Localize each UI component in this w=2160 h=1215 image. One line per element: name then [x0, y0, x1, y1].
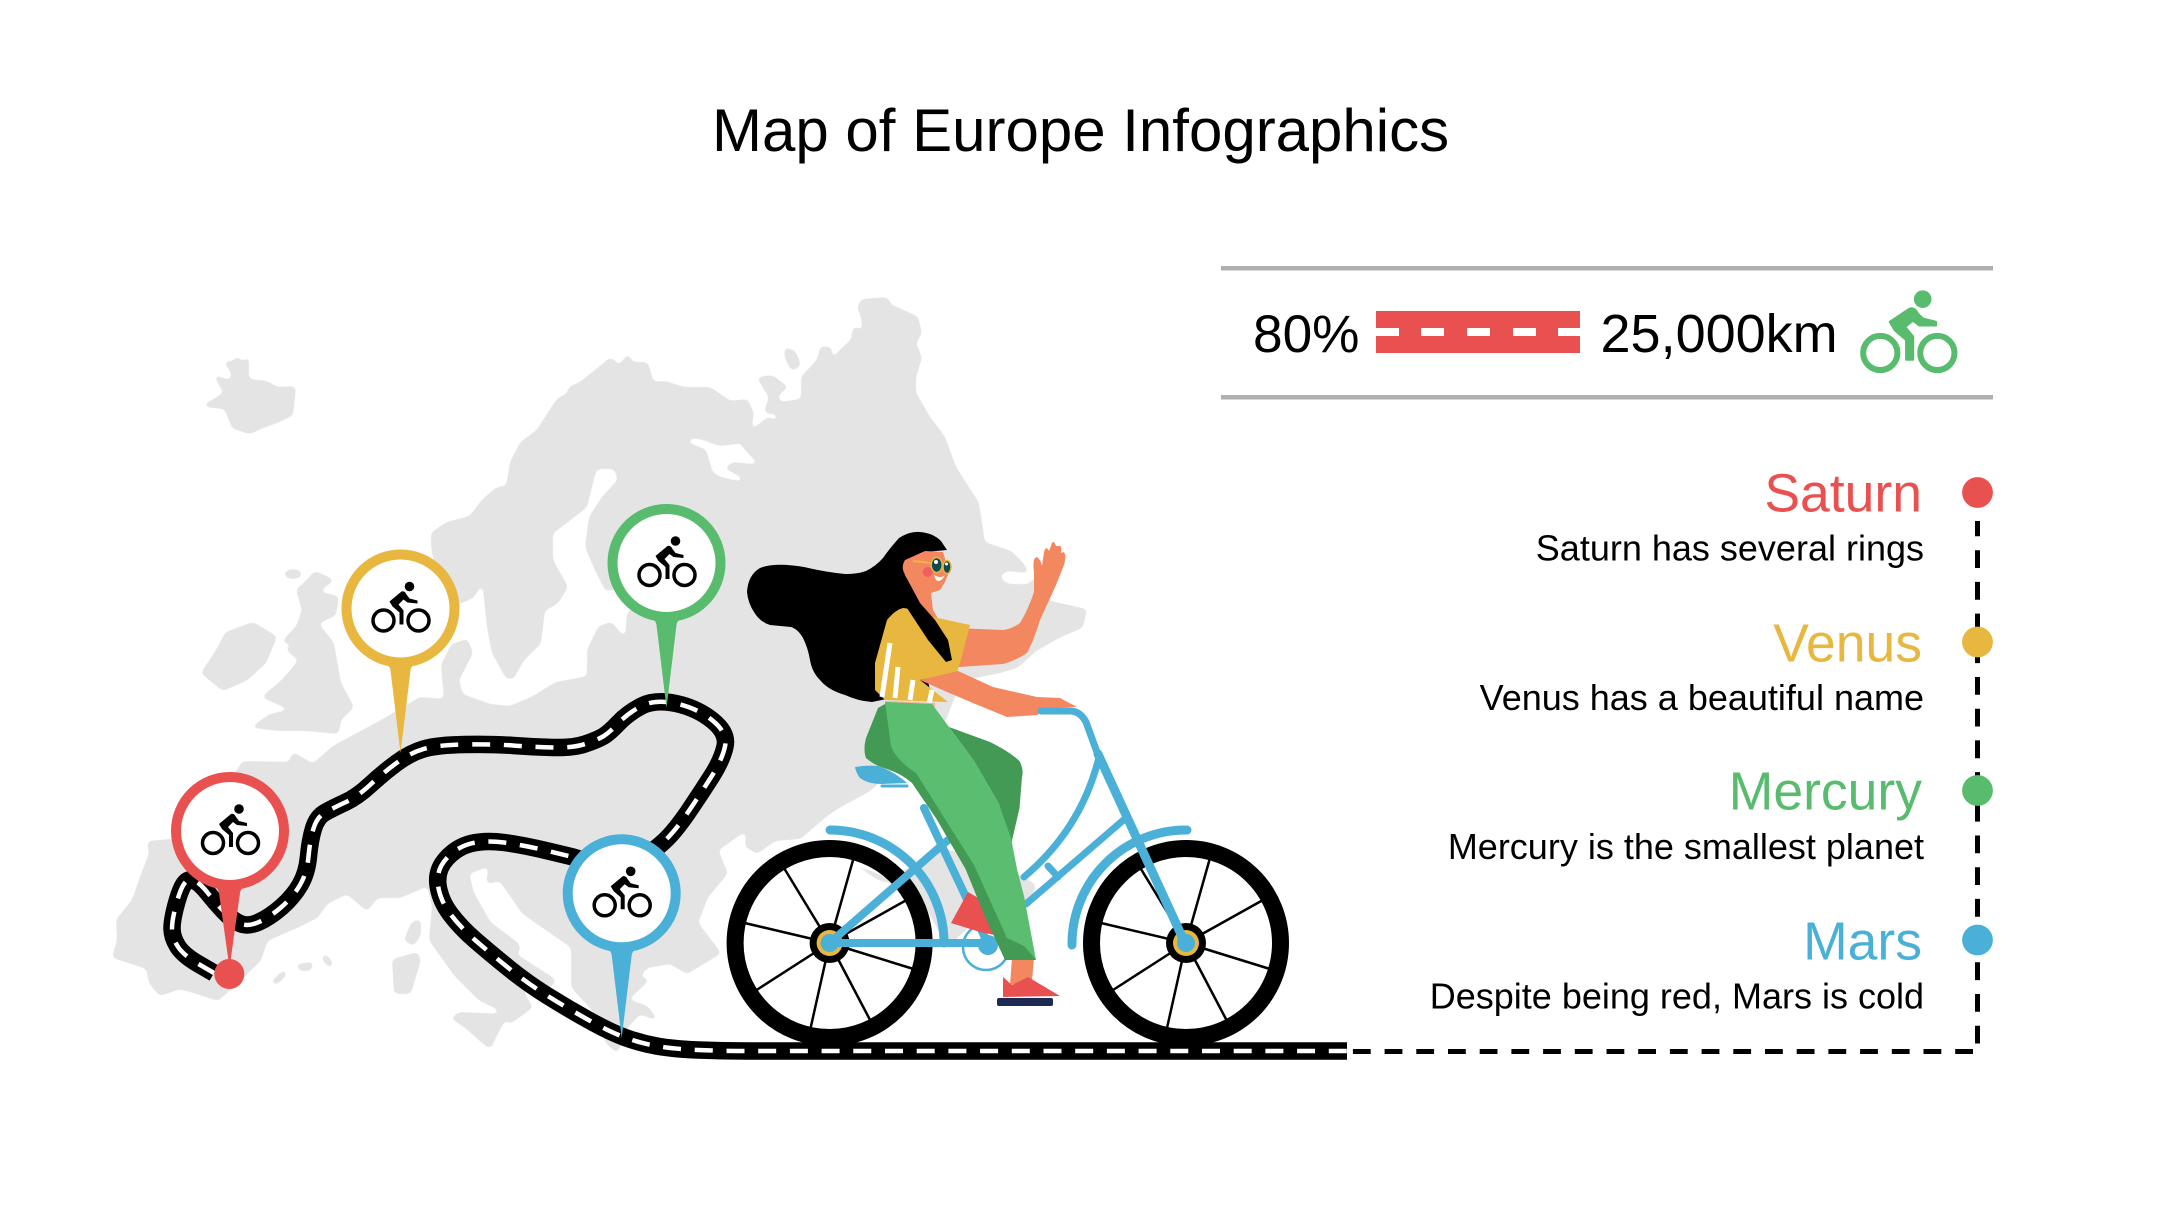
- glasses and cheek: [913, 558, 951, 581]
- front leg shadow: [864, 704, 1036, 960]
- saddle: [855, 766, 907, 784]
- icon: cyclist: [373, 582, 429, 631]
- shoe sole: [997, 998, 1053, 1006]
- pin: red: [176, 777, 284, 989]
- bicycle and rider illustration: [735, 532, 1280, 1038]
- front wheel: [1092, 848, 1280, 1038]
- front leg in green: [885, 702, 1036, 960]
- legend item: Mars: [1430, 912, 1993, 1016]
- Ibiza: [272, 970, 285, 984]
- front leg skin: [1010, 958, 1034, 985]
- hair: [747, 532, 947, 702]
- pin: yellow: [346, 554, 454, 753]
- icon: cyclist: [594, 866, 650, 916]
- raised arm: [945, 542, 1065, 668]
- rear wheel: [735, 848, 924, 1038]
- legend item: Venus: Venus has a beautiful name: [1480, 677, 1924, 718]
- dashed connector line: [1350, 521, 1978, 1052]
- shirt stripes: [882, 643, 932, 704]
- Menorca: [322, 955, 333, 966]
- bike frame and fenders: [830, 754, 1187, 970]
- icon: cyclist: [639, 536, 695, 586]
- reaching arm: [920, 671, 1077, 717]
- legend item: Mercury: Mercury: [1729, 762, 1922, 822]
- title: Map of Europe Infographics: [712, 97, 1449, 164]
- handlebar: [1041, 711, 1098, 755]
- bike hubs: [821, 934, 1195, 955]
- distance value: 25,000km: [1600, 304, 1838, 364]
- legend item: Saturn: Saturn has several rings: [1536, 528, 1924, 568]
- road bar: [1376, 311, 1580, 353]
- Sardinia: [393, 953, 420, 993]
- legend item: Mercury: Mercury is the smallest planet: [1448, 826, 1924, 867]
- face and neck: [903, 551, 949, 632]
- legend item: Saturn: [1536, 464, 1993, 568]
- Corsica: [405, 920, 420, 945]
- icon: cyclist: [202, 804, 258, 854]
- Ireland: [202, 623, 276, 690]
- Sicily: [452, 1013, 507, 1048]
- waistband: [885, 703, 935, 705]
- rear shoe: [951, 892, 995, 935]
- Great Britain: [253, 572, 353, 733]
- percentage: 80%: [1253, 305, 1359, 364]
- Turkey: [850, 850, 1035, 945]
- hair strand over shirt: [895, 575, 952, 662]
- icon: green cyclist: [1863, 290, 1954, 370]
- legend item: Venus: Venus: [1773, 614, 1922, 674]
- legend item: Mercury: [1448, 762, 1993, 867]
- legend item: Saturn: Saturn: [1764, 464, 1922, 524]
- pin: green: [612, 509, 720, 708]
- legend item: Mars: Despite being red, Mars is cold: [1430, 976, 1924, 1016]
- Balearic islands: [297, 963, 313, 970]
- Kolguev island: [785, 348, 800, 370]
- front shoe: [1003, 977, 1060, 997]
- Faroe islands: [285, 570, 301, 578]
- legend item: Venus: [1480, 614, 1993, 718]
- legend item: Mars: Mars: [1803, 912, 1922, 972]
- road route: [172, 702, 1347, 1051]
- map of Europe: [113, 298, 1086, 1052]
- pin: blue: [568, 839, 676, 1038]
- Iceland: [204, 356, 295, 433]
- back thigh in dark green: [949, 727, 1023, 845]
- distance stat panel: [1221, 266, 1993, 400]
- mainland Europe: [113, 298, 1086, 1052]
- shirt: [875, 608, 970, 702]
